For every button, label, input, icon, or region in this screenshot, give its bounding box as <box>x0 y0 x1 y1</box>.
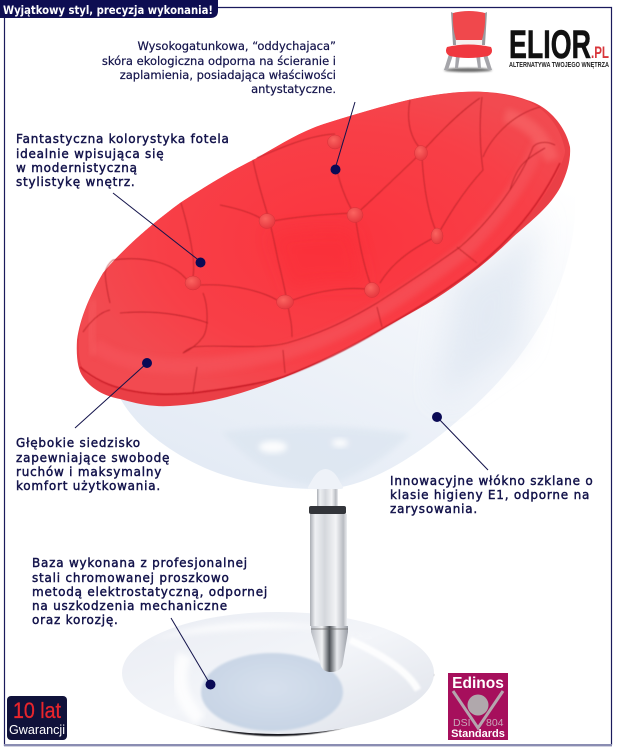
text: colour: idealnie wpisująca się <box>16 147 164 161</box>
seams <box>83 97 555 393</box>
text: fibreglass: zarysowania. <box>390 502 478 516</box>
badge: Edinos standards: Standards <box>451 728 505 740</box>
text: deep seat: komfort użytkowania. <box>16 479 161 493</box>
text: leather <box>102 39 336 96</box>
badge: Edinos standards: 804 <box>486 717 504 729</box>
text: leather: Wysokogatunkowa, “oddychajaca” <box>137 39 336 53</box>
text: colour: stylistykę wnętrz. <box>16 175 136 189</box>
title tab: Wyjątkowy styl, precyzja wykonania! <box>3 3 213 17</box>
front rim line <box>80 163 560 394</box>
text: deep seat: Głębokie siedzisko <box>16 436 141 450</box>
text: fibreglass: klasie higieny E1, odporne na <box>390 488 590 502</box>
text: deep seat: zapewniające swobodę <box>16 451 170 465</box>
text: leather: antystatyczne. <box>251 82 336 96</box>
marker: base <box>171 618 216 690</box>
callout markers <box>75 102 488 690</box>
badge: Edinos standards: Edinos <box>452 675 504 692</box>
text: deep seat: ruchów i maksymalny <box>16 465 162 479</box>
text: colour <box>16 132 230 189</box>
badge: Edinos standards: DSI <box>453 717 471 729</box>
red tufted seat <box>77 92 570 406</box>
text: base: Baza wykonana z profesjonalnej <box>32 556 248 570</box>
text: base: na uszkodzenia mechaniczne <box>32 599 228 613</box>
shell reflection <box>222 426 410 486</box>
white shell <box>120 145 575 489</box>
base plate <box>122 612 434 736</box>
text: base: metodą elektrostatyczną, odpornej <box>32 585 268 599</box>
text: colour: w modernistyczną <box>16 161 138 175</box>
text: base: stali chromowanej proszkowo <box>32 571 230 585</box>
text: fibreglass <box>390 474 594 516</box>
text: base: oraz korozję. <box>32 613 119 627</box>
base dome <box>201 653 343 731</box>
seat shadows <box>270 229 365 290</box>
text: leather: zaplamienia, posiadająca właściwości <box>120 68 336 82</box>
text: deep seat <box>16 436 170 493</box>
marker: shell <box>432 412 488 470</box>
logo: Elior <box>444 11 609 72</box>
badge: 10 lat warranty: Gwarancji <box>9 723 65 737</box>
badge: 10 lat warranty <box>7 696 67 740</box>
text: colour: Fantastyczna kolorystyka fotela <box>16 132 230 146</box>
icon: red chair <box>444 11 492 72</box>
tufting buttons <box>185 135 443 309</box>
chrome pedestal <box>309 488 348 672</box>
text: fibreglass: Innowacyjne włókno szklane o <box>390 474 594 488</box>
text: leather: skóra ekologiczna odporna na ścieranie i <box>102 54 336 68</box>
badge: Edinos standards <box>448 673 508 740</box>
marker: leather <box>330 102 355 174</box>
logo: Elior: .PL <box>591 43 609 62</box>
marker: colour <box>113 193 206 268</box>
badge: 10 lat warranty: 10 lat <box>13 698 61 723</box>
cushion roll highlight <box>184 148 538 369</box>
marker: seat <box>75 358 152 428</box>
text: base <box>32 556 268 627</box>
